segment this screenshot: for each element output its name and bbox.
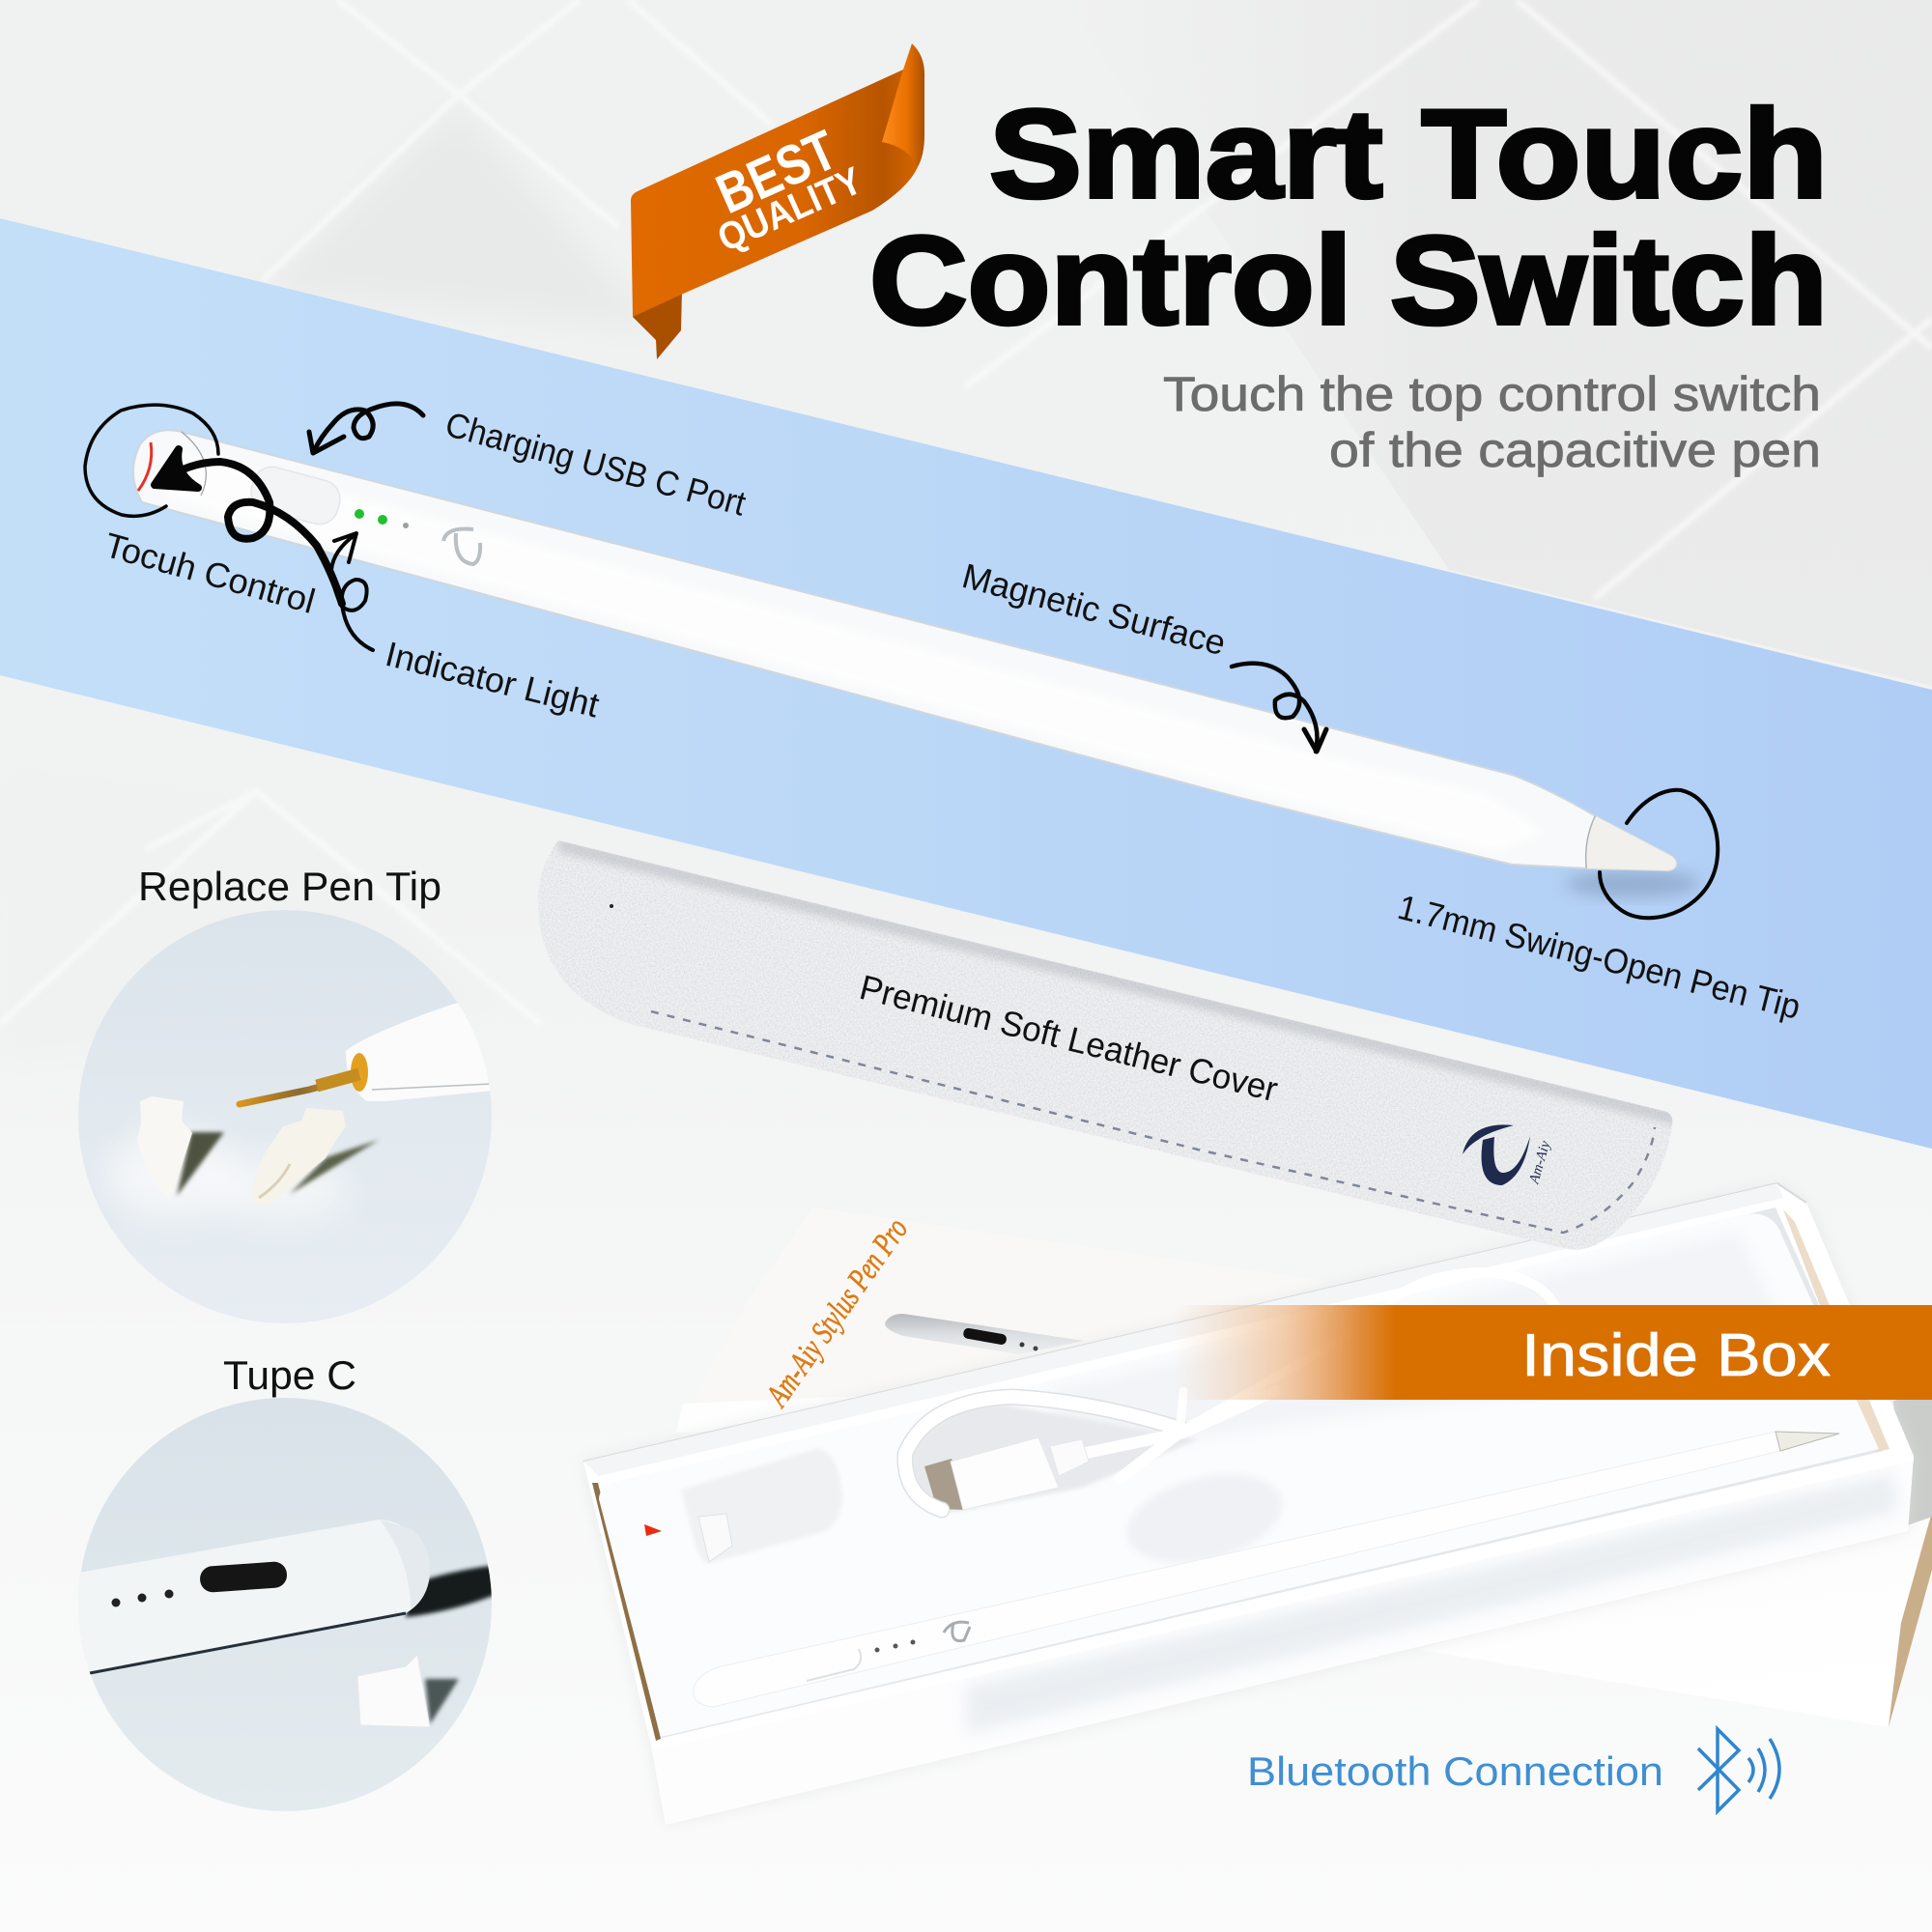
icon: bluetooth (1698, 1729, 1779, 1811)
bluetooth connection (1247, 1729, 1779, 1811)
box script title: Am-Aiy Stylus Pen Pro (758, 1212, 915, 1414)
leather label: Premium Soft Leather Cover (856, 967, 1282, 1109)
circle photo: replacement tips (78, 910, 502, 1323)
arrow: magnetic surface (1232, 664, 1326, 752)
stitching (651, 1011, 1655, 1233)
pen logo (443, 529, 480, 564)
plug shadow (425, 1679, 459, 1724)
side button (247, 463, 344, 528)
indicator lights (355, 509, 364, 519)
bluetooth connection: Bluetooth Connection (1247, 1748, 1663, 1794)
front wall (651, 1456, 1914, 1825)
callout labels (100, 404, 1804, 1027)
product box lid (676, 1208, 1932, 1727)
tray left edge (592, 1483, 661, 1741)
title: Smart Touch (989, 83, 1828, 224)
leather cover (538, 837, 1681, 1250)
red arrow mark (644, 1524, 662, 1536)
inside box banner (1174, 1305, 1932, 1400)
usb connector (951, 1437, 1089, 1510)
arrow: touch control (155, 449, 342, 604)
banner label: Inside Box (1521, 1322, 1831, 1389)
ribbon badge: best quality: BEST (707, 118, 846, 226)
stylus pen (133, 430, 1700, 897)
leather logo (1463, 1124, 1530, 1185)
pen in tray (694, 1432, 1839, 1707)
ribbon badge: best quality (631, 43, 924, 359)
blue diagonal band (0, 218, 1932, 1149)
arrow: touch control circle (85, 405, 218, 516)
label: replace pen tip: Replace Pen Tip (138, 864, 441, 909)
title: Control Switch (869, 210, 1828, 351)
spare tip 1 (137, 1096, 192, 1186)
hand-drawn arrows (85, 404, 1718, 918)
callout labels: Magnetic Surface (958, 555, 1230, 663)
subtitle (1163, 367, 1821, 477)
leather cover: Am-Aiy (1526, 1139, 1553, 1186)
circle: pen tip (1600, 790, 1718, 918)
tray right edge (1783, 1209, 1889, 1452)
subtitle: Touch the top control switch (1163, 367, 1821, 421)
ribbon badge: best quality: QUALITY (712, 159, 868, 260)
tray pad floor (599, 1213, 1879, 1737)
callout labels: Indicator Light (382, 634, 603, 724)
usb cable (905, 1272, 1555, 1510)
touch control mark (138, 442, 152, 491)
callout labels: Tocuh Control (100, 525, 320, 621)
circle photo: type c port (68, 1398, 497, 1811)
small pocket (681, 1449, 842, 1563)
spare tip 2 (251, 1108, 346, 1206)
title (869, 83, 1828, 351)
subtitle: of the capacitive pen (1329, 423, 1821, 477)
open box tray (583, 1183, 1914, 1825)
finger recess (1118, 1460, 1292, 1577)
dust plug (357, 1655, 430, 1727)
box lid pen image (885, 1314, 1084, 1354)
usb slot (199, 1561, 288, 1593)
label: type c: Tupe C (223, 1352, 356, 1398)
pen body (68, 1520, 430, 1676)
box lower lid (1420, 1401, 1932, 1727)
gold pin (236, 1084, 319, 1107)
arrow: charging port (309, 404, 423, 453)
callout labels: 1.7mm Swing-Open Pen Tip (1394, 887, 1804, 1027)
pen body (346, 1003, 490, 1101)
callout labels: Charging USB C Port (441, 404, 750, 524)
arrow: indicator light (331, 533, 373, 650)
cable cavity (908, 1405, 1198, 1512)
